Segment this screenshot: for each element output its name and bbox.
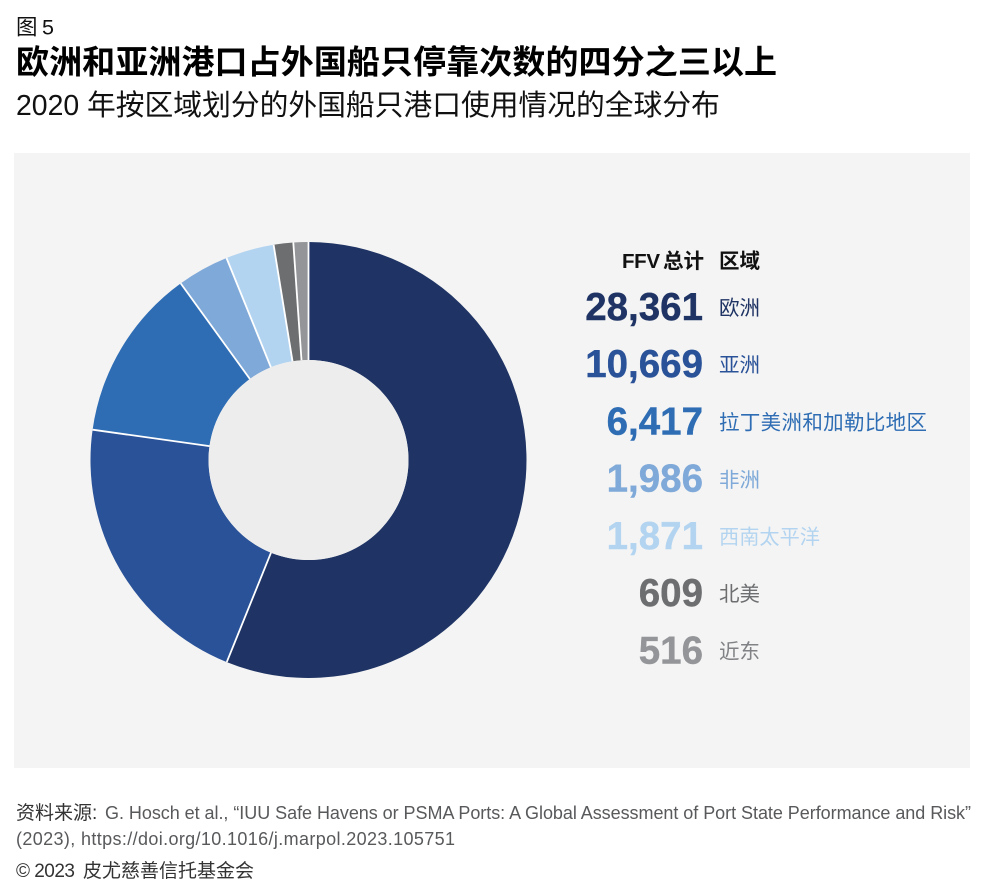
label: Latin America: 拉丁美洲和加勒比地区 [719,412,927,434]
value: Asia: 10,669 [585,343,703,386]
subtitle: 年按区域划分的外国船只港口使用情况的全球分布 [87,90,720,122]
label: Africa: 非洲 [719,469,760,492]
value: Southwest Pacific: 1,871 [607,515,703,558]
value: Latin America: 6,417 [607,400,703,444]
panel: chart background [14,153,970,768]
legend header: FFV total [622,250,704,273]
slice: Europe [227,242,526,678]
slice: Southwest Pacific [226,245,292,367]
slice: Near East [293,242,308,360]
label: Near East: 近东 [719,640,760,664]
slice: Africa [181,258,271,379]
subtitle: 2020 [16,90,79,122]
copyright: © 2023 [16,861,75,882]
slice: North America [274,242,302,361]
donut chart [90,242,526,678]
title: 欧洲和亚洲港口占外国船只停靠次数的四分之三以上 [16,44,777,80]
legend header: region: 区域 [719,250,760,273]
value: Near East: 516 [639,630,703,672]
value: Africa: 1,986 [607,458,703,500]
value: North America: 609 [639,572,703,615]
label: North America: 北美 [719,583,760,606]
slice: Asia [90,430,271,662]
slice: Latin America and Caribbean [93,283,250,446]
source citation second line: (2023), https://doi.org/10.1016/j.marpol.2023.105751 [16,829,455,849]
label: Southwest Pacific: 西南太平洋 [719,526,820,549]
copyright [16,860,254,882]
legend header: FFV total: 总计 [663,250,704,273]
label: Europe: 欧洲 [719,297,760,320]
figure label: 图 5 [16,16,54,40]
value: Europe: 28,361 [585,286,703,329]
copyright: 皮尤慈善信托基金会 [83,860,254,882]
source citation: G. Hosch et al., “IUU Safe Havens or PSMA Ports: A Global Assessment of Port State Performance and Risk” [105,803,971,823]
source label: 资料来源: [16,802,97,824]
legend header: FFV total: FFV [622,250,660,273]
label: Asia: 亚洲 [719,354,760,377]
donut centre [208,360,408,560]
